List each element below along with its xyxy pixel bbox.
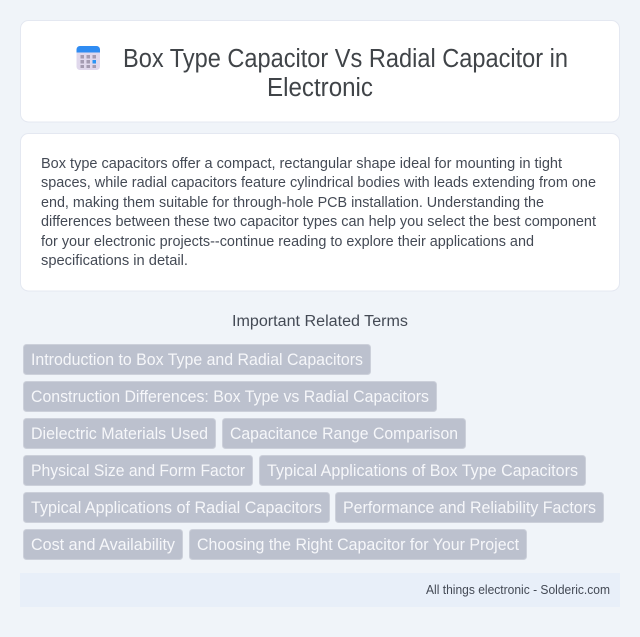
icon: calendar (76, 46, 100, 70)
title: Electronic (267, 74, 373, 102)
tag (190, 530, 526, 560)
tag: Dielectric Materials Used (31, 424, 208, 443)
title: Box Type Capacitor Vs Radial Capacitor in (123, 45, 568, 73)
tag: Introduction to Box Type and Radial Capacitors (31, 350, 363, 369)
panel: description: specifications in detail. (41, 252, 188, 269)
tag group: related terms (24, 344, 604, 560)
footer: All things electronic - Solderic.com (426, 583, 610, 597)
title (123, 45, 568, 102)
tag (336, 492, 604, 522)
tag: Construction Differences: Box Type vs Radial Capacitors (31, 387, 429, 406)
heading: important related terms: Important Related Terms (232, 313, 408, 330)
footer (20, 573, 620, 607)
tag: Typical Applications of Box Type Capacitors (267, 461, 578, 480)
tag (260, 456, 586, 486)
tag: Performance and Reliability Factors (343, 498, 596, 517)
tag: Capacitance Range Comparison (230, 424, 458, 443)
panel: description: for your electronic projects--continue reading to explore their applications and (41, 233, 534, 250)
panel: description: Box type capacitors offer a compact, rectangular shape ideal for mounting in tight (41, 155, 563, 172)
tag (24, 418, 216, 448)
tag (24, 530, 182, 560)
panel: description: spaces, while radial capacitors feature cylindrical bodies with leads extending from one (41, 174, 596, 191)
tag (24, 344, 370, 374)
tag (24, 456, 252, 486)
tag: Choosing the Right Capacitor for Your Project (197, 535, 519, 554)
panel: description: differences between these two capacitor types can help you select the best component (41, 213, 597, 230)
tag: Physical Size and Form Factor (31, 461, 245, 480)
tag: Cost and Availability (31, 535, 175, 554)
tag (222, 418, 466, 448)
panel: description (20, 134, 620, 291)
tag (24, 382, 436, 412)
tag (24, 492, 330, 522)
panel: header card (20, 20, 620, 122)
tag: Typical Applications of Radial Capacitors (31, 498, 322, 517)
panel: description: end, making them suitable for through-hole PCB installation. Understanding the (41, 194, 544, 211)
